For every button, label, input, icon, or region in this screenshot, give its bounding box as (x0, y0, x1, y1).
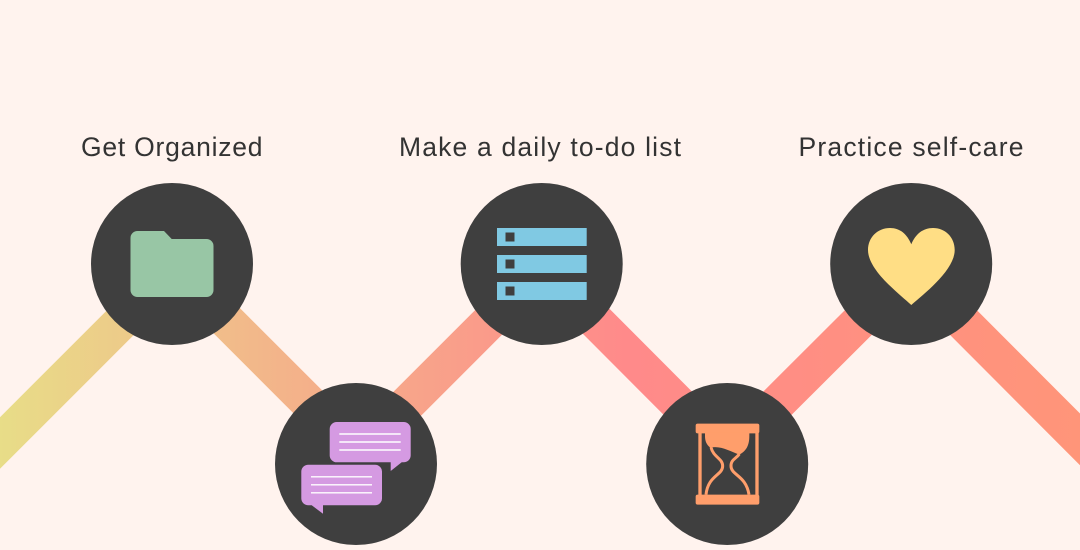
step 4: hourglass node (646, 383, 808, 545)
heading: Practice self-care: Practice self-care (798, 132, 1024, 162)
step 5: heart node (830, 183, 992, 345)
heading: Get Organized: Get Organized (81, 132, 262, 162)
icon: speech bubbles (301, 422, 411, 514)
zigzag gradient path (0, 268, 1080, 503)
step 3: list node (461, 183, 623, 345)
icon: hourglass (696, 424, 759, 505)
step 2: chat node (275, 383, 437, 545)
icon: heart (868, 228, 955, 305)
heading: Make a daily to-do list: Make a daily to-do list (399, 132, 682, 162)
step 1: folder node (91, 183, 253, 345)
icon: folder (130, 231, 214, 297)
icon: to-do list (497, 228, 587, 300)
